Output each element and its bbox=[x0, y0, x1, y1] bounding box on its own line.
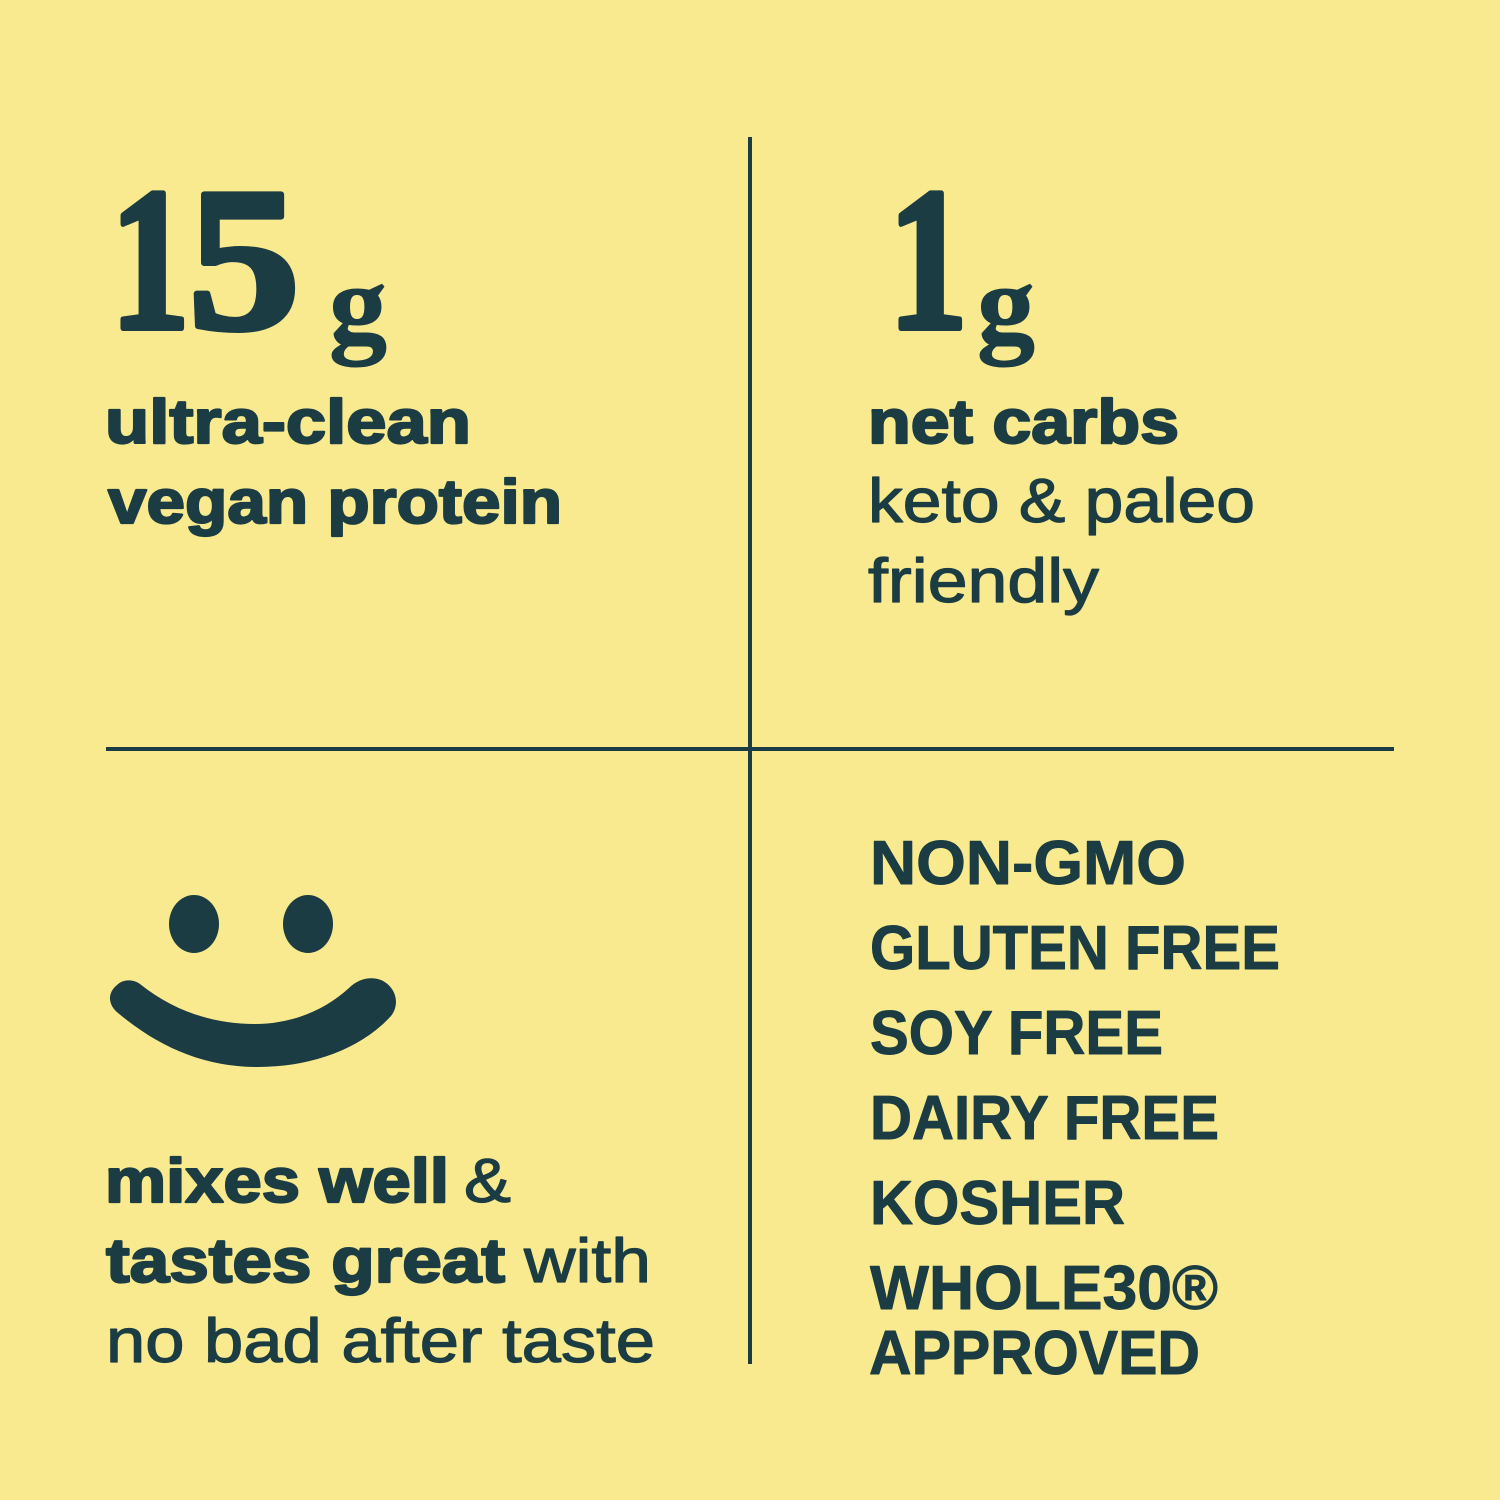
label: kosher: KOSHER bbox=[870, 1169, 1125, 1238]
heading: ultra-clean: ultra-clean bbox=[105, 388, 471, 457]
label: non-gmo: NON-GMO bbox=[870, 829, 1186, 898]
text: tastes great with: tastes great bbox=[106, 1227, 505, 1296]
panel: taste bbox=[105, 895, 655, 1376]
label: dairy free: DAIRY FREE bbox=[870, 1084, 1219, 1153]
label: whole30 approved: APPROVED bbox=[869, 1319, 1200, 1388]
text: friendly: friendly bbox=[868, 547, 1099, 616]
text: tastes great with: with bbox=[523, 1227, 651, 1296]
label: whole30 approved: WHOLE30® bbox=[870, 1254, 1218, 1323]
stat: 15: 1 bbox=[110, 147, 190, 373]
stat: 15: 5 bbox=[188, 147, 300, 373]
unit: g: g bbox=[329, 243, 387, 367]
text: mixes well and: mixes well bbox=[105, 1147, 449, 1216]
stat: 1: 1 bbox=[888, 147, 968, 373]
panel: net carbs bbox=[868, 147, 1255, 616]
label: soy free: SOY FREE bbox=[870, 999, 1163, 1068]
heading: vegan protein: vegan protein bbox=[108, 468, 562, 537]
text: no bad after taste: no bad after taste bbox=[106, 1307, 655, 1376]
label: gluten free: GLUTEN FREE bbox=[870, 914, 1280, 983]
panel: certifications bbox=[869, 829, 1280, 1388]
label: whole30 approved bbox=[869, 1254, 1218, 1388]
panel: protein bbox=[105, 147, 562, 537]
unit: g: g bbox=[977, 243, 1035, 367]
text: keto and paleo: keto & paleo bbox=[868, 467, 1255, 536]
text: mixes well and: & bbox=[464, 1147, 511, 1216]
heading: net carbs: net carbs bbox=[868, 388, 1179, 457]
icon: smiley bbox=[110, 895, 396, 1067]
